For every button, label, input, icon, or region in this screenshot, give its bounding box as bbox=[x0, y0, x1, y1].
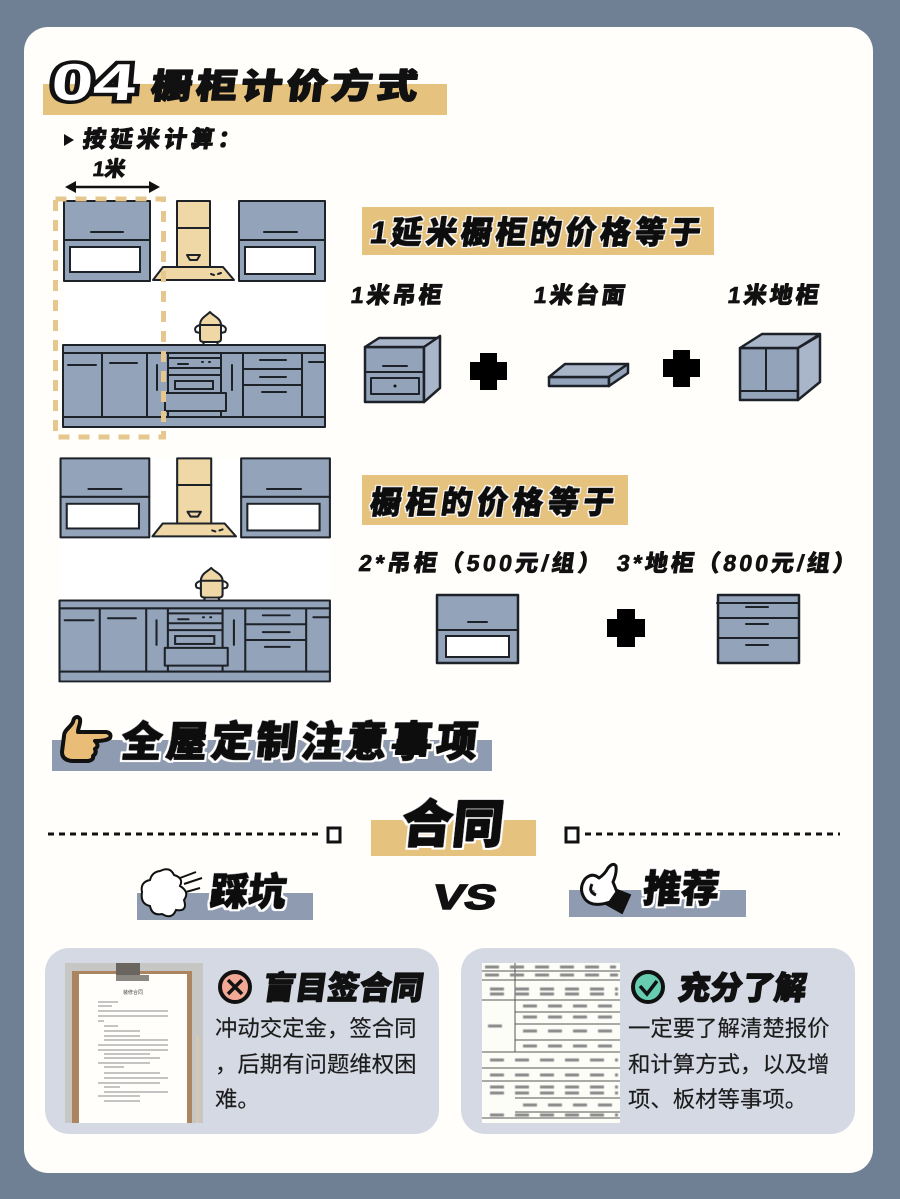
banner: cabinet price bbox=[362, 475, 628, 525]
icon: drawer cabinet front bbox=[717, 595, 799, 663]
contract divider left bbox=[48, 828, 340, 842]
panel: recommendation card: 一定要了解清楚报价 bbox=[628, 1016, 830, 1041]
icon: plus bbox=[607, 609, 645, 647]
title bbox=[43, 54, 447, 115]
kitchen elevation with 1m highlight bbox=[56, 199, 325, 437]
contract heading bbox=[371, 796, 536, 856]
component labels: 1米地柜 bbox=[726, 282, 824, 308]
clipboard photo: 装修合同 bbox=[123, 989, 143, 996]
panel: pitfall card: 难。 bbox=[215, 1087, 260, 1112]
panel: pitfall card: ，后期有问题维权困 bbox=[215, 1052, 417, 1077]
quotation table image bbox=[482, 963, 620, 1123]
icon: wall cabinet 3d bbox=[365, 336, 440, 402]
contract divider right bbox=[566, 828, 840, 842]
component labels: 1米台面 bbox=[532, 282, 630, 308]
subheading: by linear metre: 按延米计算： bbox=[81, 126, 247, 152]
section heading: whole-house notes: 全屋定制注意事项 bbox=[119, 719, 484, 765]
title: 橱柜计价方式 bbox=[149, 67, 424, 105]
icon: check bbox=[633, 972, 663, 1002]
dimension label: 1 metre: 1米 bbox=[91, 157, 127, 181]
icon: base cabinet 3d bbox=[740, 334, 820, 400]
pitfall tag: 踩坑 bbox=[208, 871, 289, 914]
price labels: 3*地柜（800元/组） bbox=[615, 550, 858, 576]
banner: price of one linear metre bbox=[362, 207, 714, 255]
icon: countertop 3d bbox=[549, 364, 628, 386]
title: 04 bbox=[49, 54, 138, 112]
panel: pitfall card: 盲目签合同 bbox=[261, 970, 426, 1006]
dimension label: 1 metre bbox=[65, 157, 160, 193]
panel: recommendation card bbox=[461, 948, 855, 1134]
contract heading: 合同 bbox=[399, 796, 507, 853]
icon: plus bbox=[470, 353, 507, 390]
panel: pitfall card: 冲动交定金，签合同 bbox=[215, 1016, 417, 1041]
component labels bbox=[349, 282, 824, 308]
icon: puff cloud bbox=[142, 869, 202, 916]
panel: recommendation card: 充分了解 bbox=[676, 970, 809, 1006]
recommend tag bbox=[569, 864, 746, 917]
icon: cross bbox=[220, 972, 250, 1002]
icon: plus bbox=[663, 350, 700, 387]
price labels: 2*吊柜（500元/组） bbox=[357, 550, 603, 576]
component labels: 1米吊柜 bbox=[349, 282, 447, 308]
icon: wall cabinet front bbox=[437, 595, 518, 663]
kitchen elevation 2 bbox=[60, 458, 330, 681]
banner: cabinet price: 橱柜的价格等于 bbox=[368, 485, 621, 520]
panel: recommendation card: 和计算方式，以及增 bbox=[628, 1052, 830, 1077]
price labels bbox=[357, 550, 858, 576]
pitfall tag bbox=[137, 869, 313, 920]
vs: VS bbox=[429, 877, 501, 917]
icon: thumbs up bbox=[582, 864, 630, 913]
clipboard photo bbox=[65, 963, 203, 1123]
panel: pitfall card bbox=[45, 948, 439, 1134]
panel: recommendation card: 项、板材等事项。 bbox=[628, 1087, 807, 1112]
recommend tag: 推荐 bbox=[641, 868, 722, 911]
banner: price of one linear metre: 1延米橱柜的价格等于 bbox=[368, 215, 707, 250]
icon: pointing hand bbox=[62, 717, 110, 761]
